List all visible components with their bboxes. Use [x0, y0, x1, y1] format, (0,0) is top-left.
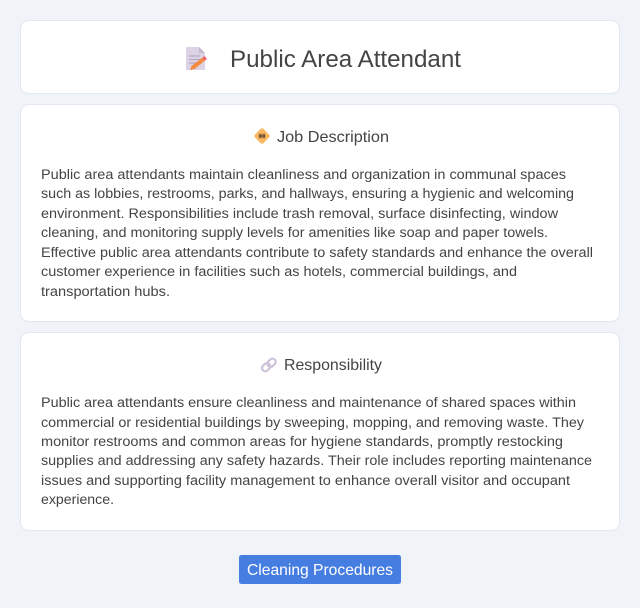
- text block: job description: such as lobbies, restrooms, parks, and hallways, ensuring a hygienic and welcoming: [41, 186, 574, 202]
- text block: responsibility: issues and supporting facility management to enhance overall visitor and occupant: [41, 473, 570, 489]
- title: Public Area Attendant: [230, 46, 461, 73]
- text block: job description: cleaning, and monitoring supply levels for amenities like soap and paper towels.: [41, 225, 548, 241]
- text block: responsibility: experience.: [41, 492, 114, 508]
- text block: job description: environment. Responsibilities include trash removal, surface disinfecting, window: [41, 206, 559, 222]
- text block: job description: Public area attendants maintain cleanliness and organization in communal spaces: [41, 167, 566, 183]
- icon: orange diamond sign: [254, 128, 270, 144]
- button: cleaning procedures: Cleaning Procedures: [247, 562, 393, 579]
- text block: job description: customer experience in facilities such as hotels, commercial buildings, and: [41, 264, 517, 280]
- text block: job description: transportation hubs.: [41, 284, 170, 300]
- text block: responsibility: commercial or residential buildings by sweeping, mopping, and removing waste. They: [41, 415, 585, 431]
- panel: job description: [20, 104, 620, 322]
- button: cleaning procedures: [239, 555, 401, 584]
- text block: job description: Effective public area attendants contribute to safety standards and enhance the overall: [41, 245, 593, 261]
- text block: responsibility: supplies and addressing any safety hazards. Their role includes reporting maintenance: [41, 453, 592, 469]
- icon: document with pencil: [186, 47, 207, 70]
- panel: responsibility: [20, 332, 620, 530]
- text block: job description: [41, 167, 593, 300]
- icon: chain link: [261, 357, 277, 373]
- panel: header: [20, 20, 620, 94]
- text block: responsibility: Public area attendants ensure cleanliness and maintenance of shared spaces within: [41, 395, 576, 411]
- heading: job description: Job Description: [277, 129, 389, 146]
- heading: responsibility: Responsibility: [284, 357, 382, 374]
- text block: responsibility: monitor restrooms and common areas for hygiene standards, promptly restocking: [41, 434, 563, 450]
- text block: responsibility: [41, 395, 592, 508]
